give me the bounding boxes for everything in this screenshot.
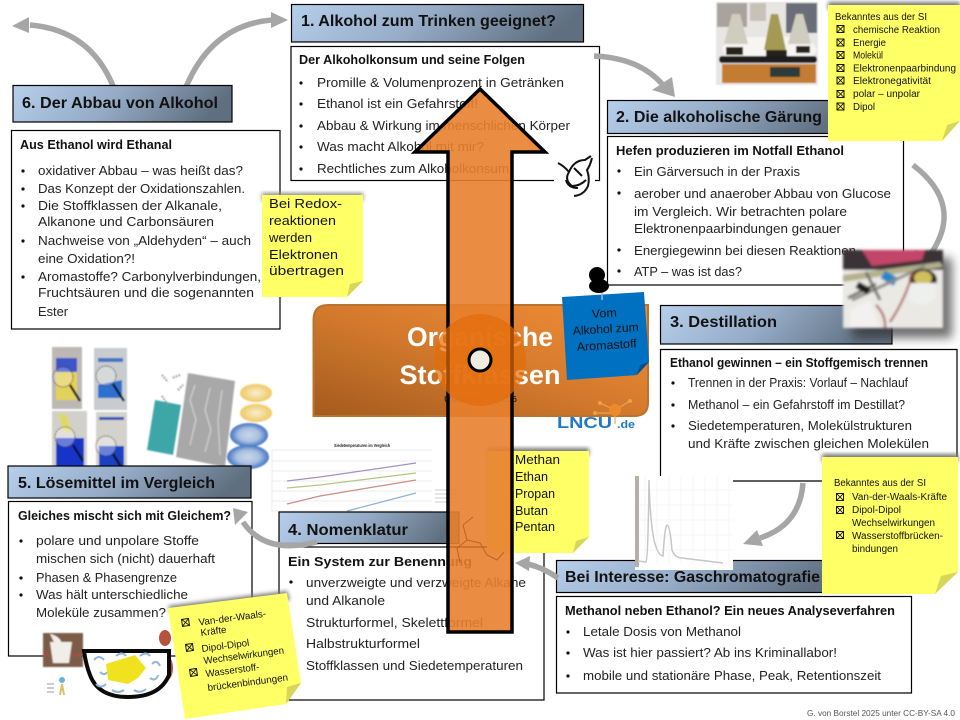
section 4 heading bbox=[279, 512, 459, 544]
section 6 heading: 6. Der Abbau von Alkohol bbox=[22, 95, 218, 112]
icon: push pin bbox=[589, 267, 609, 300]
panel: section 1: Ethanol ist ein Gefahrstoff! bbox=[317, 97, 478, 111]
panel: section 6: Alkanone und Carbonsäuren bbox=[38, 215, 214, 229]
panel: section 2: im Vergleich. Wir betrachten polare bbox=[634, 205, 847, 219]
photo: distillation apparatus bbox=[843, 250, 952, 338]
sticky note: Bekanntes aus der SI, section 3: Van-der-Waals-Kräfte bbox=[852, 492, 948, 503]
panel: section 4 bbox=[279, 547, 544, 700]
central title block: Stoffklassen bbox=[400, 360, 560, 390]
section 1 heading bbox=[292, 4, 584, 42]
sticky note: Bekanntes aus der SI, section 2 bbox=[828, 2, 960, 141]
panel: section 2: Hefen produzieren im Notfall Ethanol bbox=[616, 144, 844, 158]
section 2 heading bbox=[608, 100, 848, 134]
section 3 heading bbox=[660, 306, 892, 344]
panel: section 4: Halbstrukturformel bbox=[306, 637, 420, 651]
sticky note: intermolecular forces, rotated: Van-der-Waals- bbox=[198, 609, 267, 628]
credit line: G. von Borstel 2025 unter CC-BY-SA 4.0 bbox=[807, 708, 955, 718]
section 1 heading: 1. Alkohol zum Trinken geeignet? bbox=[301, 13, 556, 30]
central hub circle bbox=[434, 314, 526, 406]
section: Gaschromatografie heading bbox=[556, 560, 842, 592]
section 3 heading: 3. Destillation bbox=[670, 314, 777, 331]
sticky note: alkanes list: Butan bbox=[515, 503, 548, 518]
sticky note: intermolecular forces, rotated: brückenbindungen bbox=[207, 672, 289, 694]
sticky note: Bekanntes aus der SI, section 2: Energie bbox=[853, 38, 887, 49]
panel: section 5: Phasen & Phasengrenze bbox=[36, 571, 177, 585]
collage: molecules and teal jar bbox=[147, 373, 272, 469]
large central arrow bbox=[415, 89, 545, 632]
sticky note: Bekanntes aus der SI, section 3: Wasserstoffbrücken- bbox=[852, 531, 943, 542]
chart: boiling points comparison: Siedetemperaturen im Vergleich bbox=[334, 443, 390, 448]
panel: section 6: Ester bbox=[38, 305, 68, 319]
sticky note: Bekanntes aus der SI, section 2: Molekül bbox=[853, 50, 883, 62]
grey arrow: 2 to 3 bbox=[913, 165, 944, 275]
panel: section 6: eine Oxidation?! bbox=[38, 252, 135, 266]
grey arrow: 6 to 1 bbox=[186, 12, 288, 87]
central title block: Organische bbox=[407, 322, 553, 352]
sticky note: alkanes list: Ethan bbox=[515, 469, 548, 484]
logo: LNCU.de bbox=[557, 399, 635, 432]
section: Gaschromatografie heading: Bei Interesse: Gaschromatografie bbox=[565, 569, 820, 586]
sticky note: Bekanntes aus der SI, section 2: polar – unpolar bbox=[853, 89, 921, 100]
panel: section 6: Aus Ethanol wird Ethanal bbox=[20, 138, 172, 152]
panel: section 6: oxidativer Abbau – was heißt das? bbox=[38, 164, 243, 178]
panel: section 4: und Alkanole bbox=[306, 594, 385, 608]
sticky note: Bekanntes aus der SI, section 3: bindungen bbox=[852, 544, 898, 555]
grey arrow: 1 to 2 bbox=[594, 56, 675, 97]
panel: section 4: Ein System zur Benennung bbox=[288, 555, 472, 569]
icon: small figure with legend bbox=[47, 677, 65, 695]
panel: section 2 bbox=[608, 136, 904, 285]
panel: section 6 bbox=[12, 130, 280, 329]
sticky note: blue, Vom Alkohol zum Aromastoff: Alkohol zum bbox=[572, 320, 639, 338]
chart: chromatogram bbox=[635, 476, 733, 570]
panel: section 5: Was hält unterschiedliche bbox=[36, 588, 188, 602]
panel: section 1: Der Alkoholkonsum und seine Folgen bbox=[299, 53, 525, 67]
panel: Gaschromatografie: Methanol neben Ethanol? Ein neues Analyseverfahren bbox=[565, 604, 895, 618]
sticky note: intermolecular forces, rotated: Dipol-Dipol bbox=[201, 638, 250, 655]
sticky note: Redox: Bei Redox- bbox=[269, 196, 342, 211]
panel: section 1: Abbau & Wirkung im menschlichen Körper bbox=[317, 119, 570, 133]
sticky note: Bekanntes aus der SI, section 3: Wechselwirkungen bbox=[852, 518, 935, 529]
chart: boiling points comparison bbox=[270, 440, 460, 512]
panel: section 5: Gleiches mischt sich mit Gleichem? bbox=[18, 509, 231, 523]
sticky note: Bekanntes aus der SI, section 3 bbox=[822, 454, 958, 594]
sticky note: blue, Vom Alkohol zum Aromastoff bbox=[562, 292, 649, 380]
sticky note: Bekanntes aus der SI, section 3: Dipol-Dipol bbox=[852, 505, 901, 516]
panel: Gaschromatografie: Was ist hier passiert? Ab ins Kriminallabor! bbox=[583, 646, 837, 660]
grey arrow: 6 to previous topic bbox=[12, 17, 113, 86]
panel: section 1: Promille & Volumenprozent in Getränken bbox=[317, 76, 564, 90]
sticky note: alkanes list bbox=[487, 448, 589, 553]
logo: LNCU.de: LNCU bbox=[557, 415, 612, 432]
sticky note: Bekanntes aus der SI, section 3: Bekanntes aus der SI bbox=[834, 478, 926, 489]
sticky note: blue, Vom Alkohol zum Aromastoff: Aromastoff bbox=[576, 336, 638, 354]
panel: section 4: Stoffklassen und Siedetemperaturen bbox=[306, 659, 523, 673]
sticky note: Bekanntes aus der SI, section 2: Elektronegativität bbox=[853, 76, 931, 87]
panel: section 2: Ein Gärversuch in der Praxis bbox=[634, 165, 800, 179]
panel: section 1: Rechtliches zum Alkoholkonsum bbox=[317, 162, 509, 176]
sticky note: intermolecular forces, rotated: Kräfte bbox=[200, 625, 228, 639]
sticky note: Redox: werden bbox=[268, 230, 312, 245]
sticky note: alkanes list: Pentan bbox=[515, 519, 555, 534]
photo: milk poured into glass bbox=[43, 633, 83, 667]
section 5 heading: 5. Lösemittel im Vergleich bbox=[18, 475, 215, 492]
section 5 heading bbox=[8, 466, 251, 498]
panel: section 6: Fruchtsäuren und die sogenannten bbox=[38, 286, 254, 300]
panel: section 4: unverzweigte und verzweigte Alkane bbox=[306, 576, 526, 590]
photos: solvent jars with magnifiers bbox=[52, 347, 127, 474]
panel: section 6: Nachweise von „Aldehyden“ – auch bbox=[38, 234, 251, 248]
panel: section 2: Elektronenpaarbindungen genauer bbox=[634, 222, 841, 236]
panel: section 3: Methanol – ein Gefahrstoff im Destillat? bbox=[688, 398, 905, 412]
logo: LNCU.de: .de bbox=[617, 419, 635, 431]
panel: section 6: Das Konzept der Oxidationszahlen. bbox=[38, 182, 245, 196]
sticky note: Redox: reaktionen bbox=[269, 213, 336, 228]
panel: section 6: Die Stoffklassen der Alkanale, bbox=[38, 199, 222, 213]
icon: glasses with molecules bbox=[84, 630, 173, 697]
grey arrow: 3 to Gaschromatografie bbox=[743, 483, 803, 546]
panel: section 2: Energiegewinn bei diesen Reaktionen bbox=[634, 244, 856, 258]
sticky note: Bekanntes aus der SI, section 2: Dipol bbox=[853, 102, 875, 113]
photo: fermentation flasks on stirrer bbox=[716, 2, 818, 85]
section 6 heading bbox=[13, 86, 232, 122]
sticky note: Bekanntes aus der SI, section 2: Elektronenpaarbindung bbox=[853, 64, 956, 74]
panel: section 5: mischen sich (nicht) dauerhaft bbox=[36, 552, 216, 566]
sticky note: blue, Vom Alkohol zum Aromastoff: Vom bbox=[591, 305, 617, 321]
sticky note: Bekanntes aus der SI, section 2: chemische Reaktion bbox=[853, 25, 940, 36]
panel: section 6: Aromastoffe? Carbonylverbindungen, bbox=[38, 270, 261, 284]
panel: section 1 bbox=[291, 46, 600, 180]
sticky note: intermolecular forces, rotated: Wechselwirkungen bbox=[203, 645, 285, 667]
panel: section 3: Siedetemperaturen, Molekülstrukturen bbox=[688, 419, 912, 433]
panel: Gaschromatografie bbox=[556, 596, 912, 693]
section 4 heading: 4. Nomenklatur bbox=[288, 522, 408, 539]
panel: section 2: aerober und anaerober Abbau von Glucose bbox=[634, 187, 891, 201]
section 2 heading: 2. Die alkoholische Gärung bbox=[616, 109, 822, 126]
grey arrow: 4 to 5 bbox=[233, 508, 317, 546]
panel: section 3: und Kräfte zwischen gleichen Molekülen bbox=[688, 437, 929, 451]
panel: section 2: ATP – was ist das? bbox=[634, 265, 742, 279]
central title block: Übersicht V_206 bbox=[444, 395, 518, 404]
panel: section 5: Moleküle zusammen? bbox=[36, 606, 166, 620]
grey arrow: Gaschromatografie to 4 bbox=[515, 556, 558, 578]
icon: hand holding bottle bbox=[554, 153, 595, 199]
panel: section 3: Trennen in der Praxis: Vorlauf – Nachlauf bbox=[688, 376, 908, 390]
sticky note: alkanes list: Propan bbox=[515, 486, 555, 501]
panel: section 3: Ethanol gewinnen – ein Stoffgemisch trennen bbox=[670, 356, 928, 370]
panel: section 1: Was macht Alkohol mit mir? bbox=[317, 140, 484, 154]
panel: section 5: polare und unpolare Stoffe bbox=[36, 534, 199, 548]
panel: Gaschromatografie: Letale Dosis von Methanol bbox=[583, 625, 741, 639]
panel: Gaschromatografie: mobile und stationäre Phase, Peak, Retentionszeit bbox=[583, 669, 882, 683]
sticky note: Redox: übertragen bbox=[269, 263, 344, 278]
sticky note: intermolecular forces, rotated: Wasserstoff- bbox=[205, 662, 260, 680]
sticky note: alkanes list: Methan bbox=[515, 452, 560, 467]
sticky note: Bekanntes aus der SI, section 2: Bekanntes aus der SI bbox=[835, 12, 927, 23]
sticky note: intermolecular forces, rotated bbox=[168, 591, 301, 719]
panel: section 5 bbox=[8, 502, 252, 656]
sticky note: Redox bbox=[262, 193, 363, 297]
central title block bbox=[314, 305, 648, 416]
panel: section 3 bbox=[660, 350, 957, 481]
sticky note: Redox: Elektronen bbox=[269, 247, 338, 262]
panel: section 4: Strukturformel, Skelettformel bbox=[306, 616, 483, 630]
